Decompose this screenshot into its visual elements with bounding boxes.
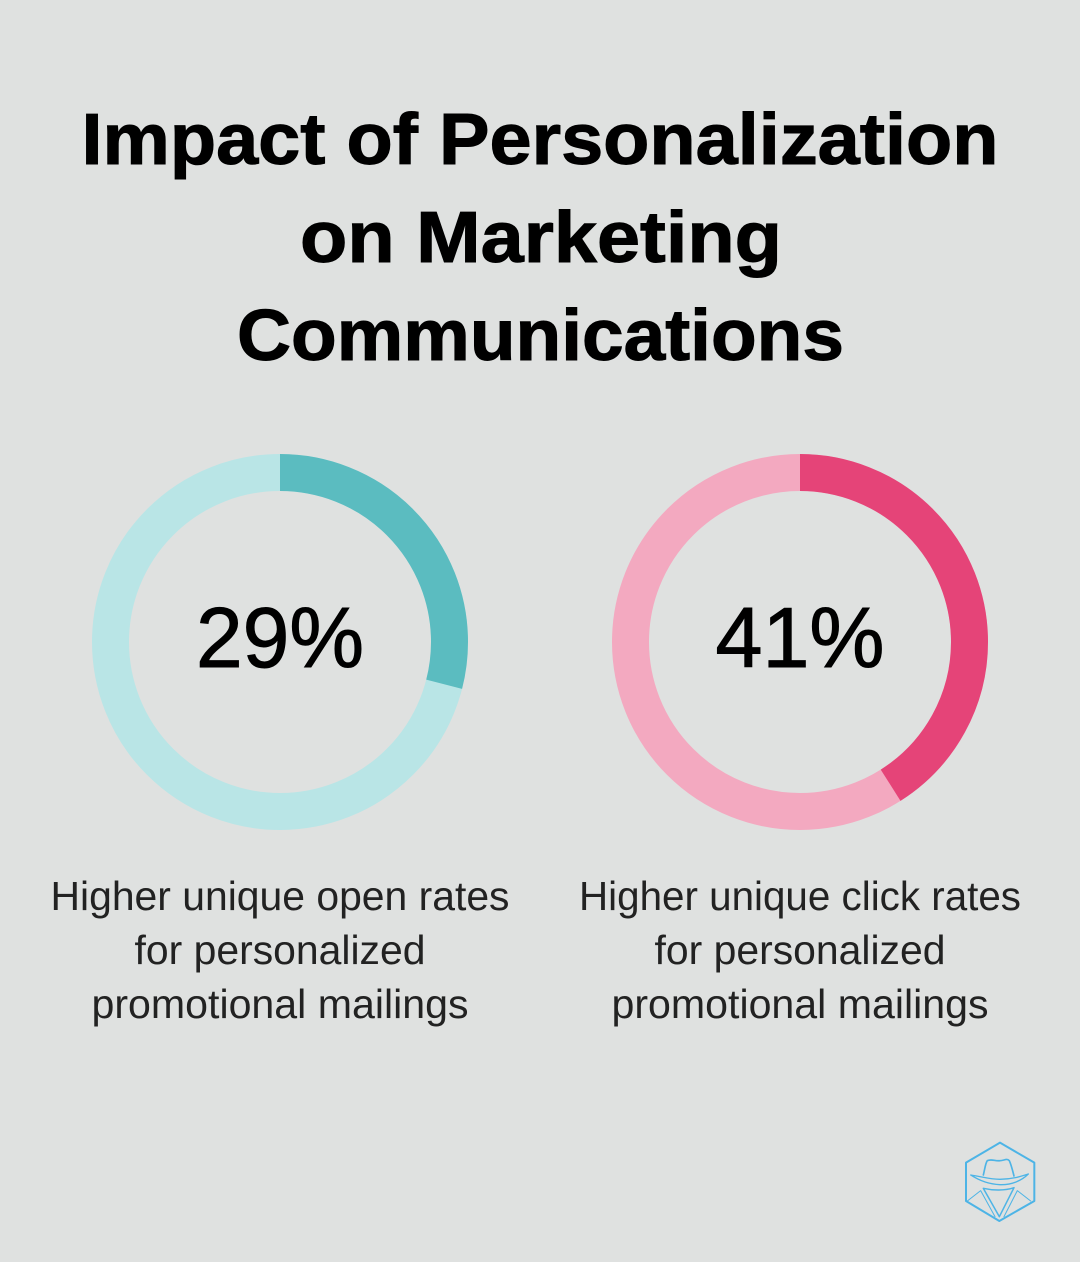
value: 41%: 41% [716,591,884,686]
icon: logo, hat in hexagon [966,1143,1034,1221]
title: on Marketing [300,198,782,278]
title: Impact of Personalization [82,100,998,180]
description: click rates: for personalized [654,927,946,973]
title: Communications [237,296,844,376]
title [82,100,998,376]
description: open rates: promotional mailings [92,981,469,1027]
description: click rates [579,873,1021,1027]
donut chart: 41% [630,472,970,812]
description: open rates: for personalized [134,927,426,973]
description: click rates: promotional mailings [612,981,988,1027]
value: 29%: 29% [196,591,364,686]
panel: click rates [579,472,1021,1027]
description: open rates [50,873,510,1027]
description: open rates: Higher unique open rates [50,873,510,919]
description: click rates: Higher unique click rates [579,873,1021,919]
donut chart: 29% [110,472,450,812]
panel: open rates [50,472,510,1027]
